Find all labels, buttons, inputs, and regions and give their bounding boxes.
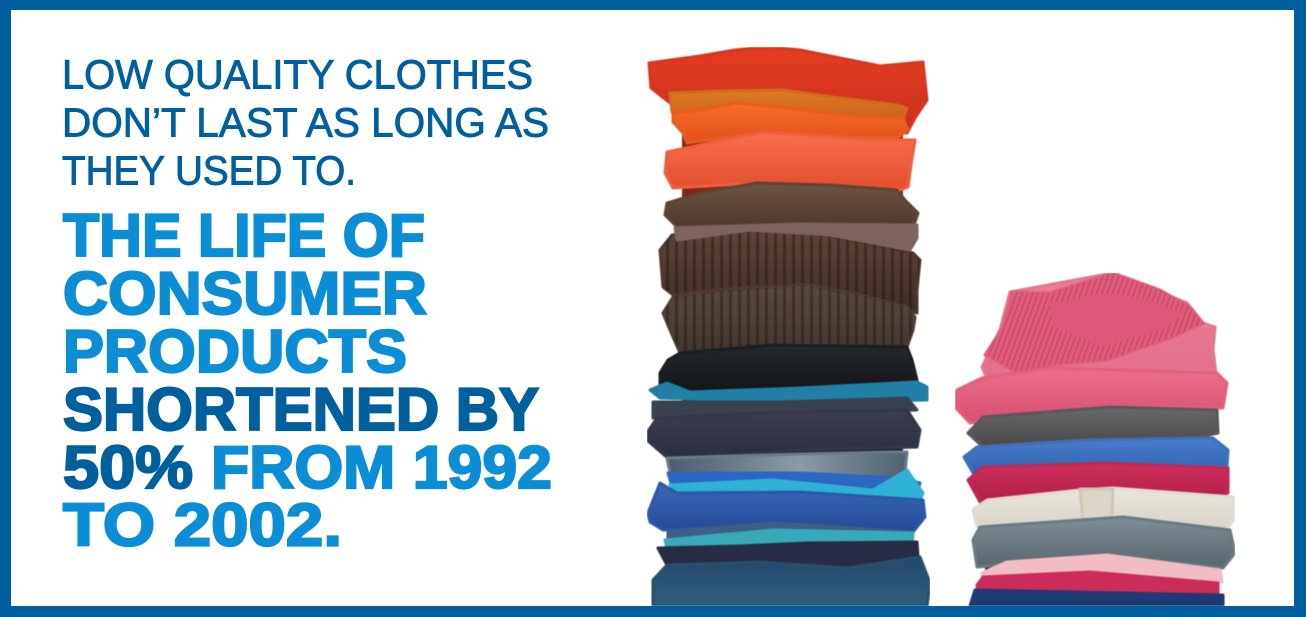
- grey denim: [667, 452, 907, 480]
- teal shirt: [665, 530, 913, 552]
- headline line 3: PRODUCTS: [63, 318, 407, 385]
- orange-brown shirt: [670, 90, 907, 118]
- intro text: [62, 52, 549, 194]
- blue sweater: [964, 438, 1228, 473]
- image: short stack of clothes: [955, 273, 1235, 606]
- pale pink sweater: [982, 555, 1222, 582]
- teal band: [650, 382, 927, 402]
- intro line 1: LOW QUALITY CLOTHES: [62, 52, 533, 98]
- intro line 2: DON’T LAST AS LONG AS: [62, 100, 549, 146]
- stack shadow backing: [682, 100, 903, 350]
- cyan shirt: [670, 470, 923, 500]
- pink sweater body: [955, 368, 1227, 423]
- collar ribs: [985, 273, 1203, 372]
- headline line 6: TO 2002.: [63, 492, 342, 558]
- crimson sweater two: [977, 572, 1218, 597]
- pink sweater back: [982, 273, 1217, 385]
- dark grey band: [653, 398, 917, 418]
- red shirt: [649, 47, 927, 133]
- blue ribbed shirt: [668, 473, 920, 490]
- grey sweater: [968, 407, 1218, 447]
- dark brown sweater: [663, 285, 915, 353]
- headline from 1992: FROM 1992: [211, 434, 552, 501]
- brown sweater ribs: [660, 229, 920, 313]
- image: tall stack of clothes: [647, 47, 930, 606]
- heather sweater: [973, 517, 1235, 568]
- brown boucle sweater: [665, 183, 918, 227]
- navy fleece: [647, 410, 920, 460]
- orange shirt: [673, 103, 908, 143]
- navy sweater: [970, 590, 1223, 606]
- headline line 1: THE LIFE OF: [63, 202, 425, 269]
- blue knit sweater: [653, 557, 930, 606]
- stack shadow backing: [985, 395, 1210, 600]
- headline line 2: CONSUMER: [63, 260, 427, 327]
- pink collar: [985, 273, 1203, 372]
- dark brown sweater ribs: [663, 285, 915, 353]
- headline statistic: [63, 202, 552, 558]
- cream cuff: [1080, 489, 1113, 522]
- slate band: [668, 523, 910, 540]
- intro line 3: THEY USED TO.: [62, 148, 356, 194]
- collar inner fold: [1050, 295, 1180, 345]
- brown sweater: [660, 229, 920, 313]
- headline 50 percent: 50%: [63, 434, 193, 501]
- salmon shirt: [665, 132, 915, 190]
- crimson sweater: [968, 463, 1228, 502]
- black sweater: [660, 345, 917, 392]
- cream sweater: [973, 488, 1235, 530]
- big blue sweater: [648, 483, 925, 532]
- dark navy shirt: [658, 542, 918, 567]
- mauve band: [675, 224, 917, 250]
- headline line 4: SHORTENED BY: [63, 376, 539, 443]
